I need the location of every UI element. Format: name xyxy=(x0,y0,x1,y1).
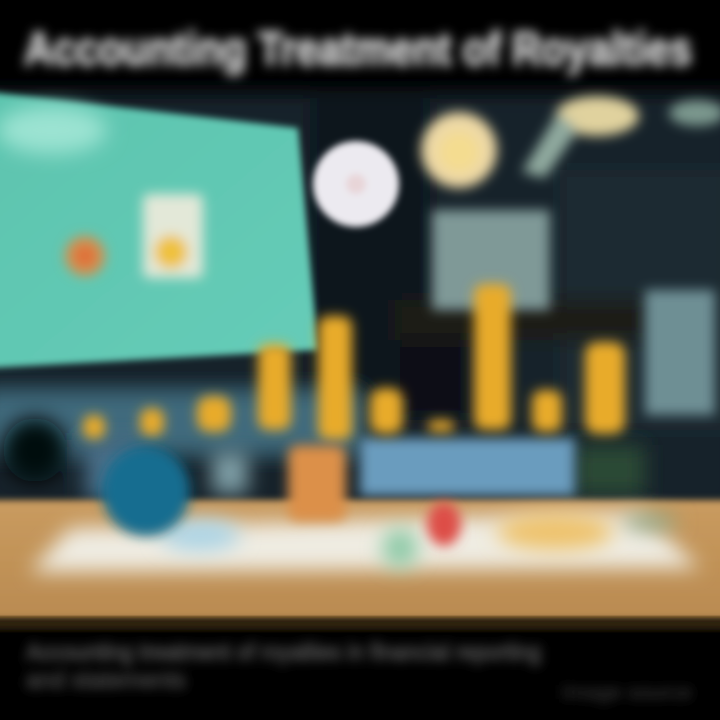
caption: and statements xyxy=(26,667,186,694)
paper on desk xyxy=(30,512,700,572)
globe xyxy=(102,446,190,536)
board highlight xyxy=(0,106,107,154)
desk edge shadow xyxy=(0,618,720,630)
lamps and shelves xyxy=(421,96,720,415)
caption: Accounting treatment of royalties in financial reporting xyxy=(26,639,541,666)
teal presentation board xyxy=(0,92,318,368)
wall clock xyxy=(313,141,399,227)
desk xyxy=(0,500,720,620)
paper colour patches xyxy=(160,513,678,568)
scene backdrop xyxy=(0,92,720,512)
blue box xyxy=(360,438,575,496)
source credit: Image source xyxy=(562,682,692,704)
board icons xyxy=(65,194,203,278)
orange cup xyxy=(288,445,346,521)
caption xyxy=(26,639,541,694)
red marker xyxy=(427,502,461,546)
lower shelf objects xyxy=(3,418,645,500)
bar chart xyxy=(83,284,625,440)
